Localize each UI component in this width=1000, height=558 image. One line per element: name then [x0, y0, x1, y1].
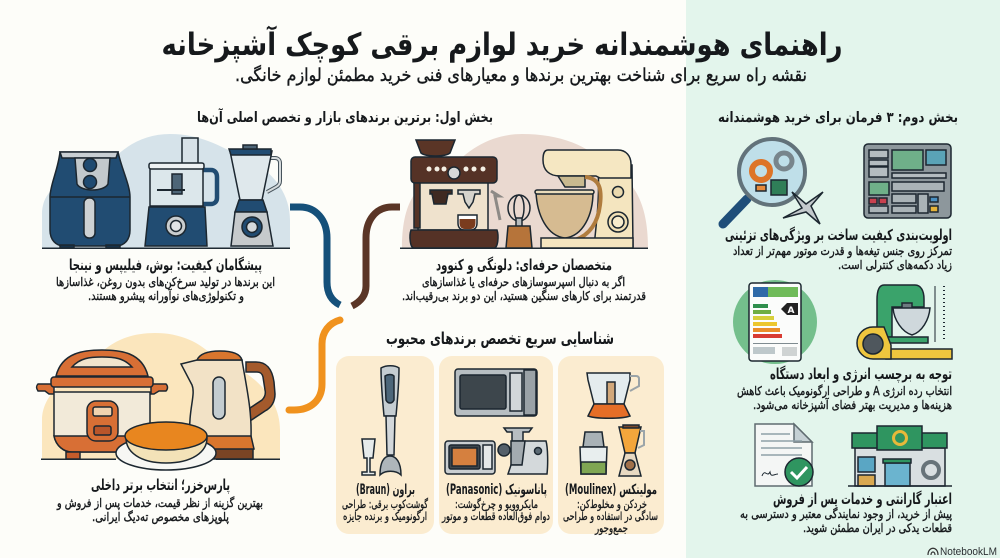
panel: professional specialists: [400, 134, 648, 304]
illustration: juice blender: [619, 425, 644, 476]
panel: quality pioneers: [42, 134, 290, 304]
baseline: [216, 458, 280, 460]
illustration: rice cooker: [36, 350, 168, 459]
logo: NotebookLM: [928, 546, 997, 558]
baseline: [42, 248, 290, 249]
brand text: خردکن و مخلوط‌کن:: [577, 497, 647, 512]
title: راهنمای هوشمندانه خرید لوازم برقی کوچک آشپزخانه: [162, 25, 842, 63]
brand text: پاناسونیک (Panasonic): [446, 482, 547, 498]
text block: پلوپزهای مخصوص ته‌دیگ ایرانی.: [92, 510, 229, 525]
text block: [56, 476, 263, 525]
heading: section two: بخش دوم: ۳ فرمان برای خرید هوشمندانه: [718, 110, 958, 126]
text block: انتخاب رده انرژی A و طراحی ارگونومیک باعث کاهش: [737, 384, 952, 399]
icon: warranty document: [755, 424, 813, 486]
illustration: glass: [362, 439, 375, 475]
text block: تمرکز روی جنس تیغه‌ها و قدرت موتور مهم‌تر از تعداد: [733, 244, 952, 259]
baseline: [41, 458, 116, 460]
text block: این برندها در تولید سرخ‌کن‌های بدون روغن، غذاسازها: [56, 275, 275, 290]
backdrop blob: [42, 333, 280, 459]
tip 3: warranty and service: [740, 424, 952, 536]
background panel: section two: [686, 0, 1000, 558]
tip 1: build quality: [723, 139, 952, 273]
illustration: kettle: [181, 351, 275, 459]
illustration: small chopper: [580, 432, 607, 474]
text block: [725, 226, 952, 273]
illustration: chopper: [587, 373, 639, 418]
card: Braun: [336, 356, 434, 534]
text block: قطعات یدکی در ایران مطمئن شوید.: [803, 521, 952, 536]
text block: بهترین گزینه از نظر قیمت، خدمات پس از فروش و: [56, 496, 263, 511]
subtitle: نقشه راه سریع برای شناخت بهترین برندها و معیارهای فنی خرید مطمئن لوازم خانگی.: [235, 64, 807, 86]
text block: [402, 256, 646, 304]
text block: زیاد دکمه‌های کنترلی است.: [838, 258, 952, 273]
illustration: hand blender: [380, 366, 401, 475]
backdrop blob: [42, 134, 290, 248]
brand text: براون (Braun): [356, 482, 415, 498]
icon: service shop: [848, 426, 952, 486]
icon: magnifier with blade: [723, 139, 823, 224]
brand text: ارگونومیک و برنده جایزه: [343, 509, 427, 524]
illustration: espresso machine: [410, 140, 500, 248]
brand text: گوشت‌کوب برقی: طراحی: [342, 497, 428, 512]
brand text: [441, 482, 550, 524]
icon: green circle: [733, 280, 817, 364]
brand text: دوام فوق‌العاده قطعات و موتور: [441, 509, 550, 524]
illustration: air fryer: [50, 152, 130, 248]
card: Moulinex: [558, 356, 664, 536]
brand text: جمع‌وجور: [594, 521, 628, 536]
text block: هزینه‌ها و مدیریت بهتر فضای آشپزخانه می‌شود.: [753, 397, 952, 413]
illustration: blender: [229, 145, 280, 246]
icon: green mixer and tape measure: [857, 285, 952, 359]
connector: orange: [289, 320, 340, 410]
icon: control panel: [864, 144, 951, 218]
connector: blue: [290, 207, 340, 305]
card: Panasonic: [439, 356, 553, 534]
baseline: [400, 248, 648, 249]
brand text: [342, 482, 428, 524]
text block: پیشگامان کیفیت: بوش، فیلیپس و نینجا: [69, 256, 262, 275]
illustration: meat grinder: [498, 428, 548, 474]
icon: energy label: [749, 283, 801, 361]
panel: domestic choice: [36, 333, 280, 525]
icon: logo mark: [928, 548, 938, 555]
illustration: small microwave: [445, 441, 495, 474]
connector: brown: [352, 207, 400, 306]
text block: [740, 490, 952, 536]
text block: قدرتمند برای کارهای سنگین هستید، این دو برند بی‌رقیب‌اند.: [402, 289, 646, 304]
brand text: [563, 482, 658, 536]
brand text: سادگی در استفاده و طراحی: [563, 509, 658, 524]
illustration: food processor: [145, 138, 217, 246]
text block: و تکنولوژی‌های نوآورانه پیشرو هستند.: [88, 288, 244, 304]
backdrop blob: [402, 134, 648, 248]
text block: پیش از خرید، از وجود نمایندگی معتبر و دسترسی به: [740, 507, 952, 522]
text block: پارس‌خزر؛ انتخاب برتر داخلی: [91, 476, 230, 495]
illustration: large microwave: [455, 369, 537, 416]
brand text: مایکروویو و چرخ‌گوشت:: [455, 497, 538, 512]
tip 2: energy label and dimensions: [733, 280, 952, 413]
text block: متخصصان حرفه‌ای: دلونگی و کنوود: [436, 256, 612, 274]
text block: اگر به دنبال اسپرسوسازهای حرفه‌ای یا غذاسازهای: [422, 275, 625, 290]
heading: section one: بخش اول: برترین برندهای بازار و تخصص اصلی آن‌ها: [197, 108, 493, 126]
heading: popular brands: شناسایی سریع تخصص برندهای محبوب: [386, 329, 614, 349]
illustration: whisk: [506, 195, 532, 248]
text block: [737, 365, 952, 413]
brand text: مولینکس (Moulinex): [565, 482, 657, 498]
illustration: stand mixer: [535, 150, 633, 248]
text block: [56, 256, 275, 304]
icon: energy label: A: [788, 306, 795, 316]
illustration: tahdig plate: [116, 422, 216, 470]
